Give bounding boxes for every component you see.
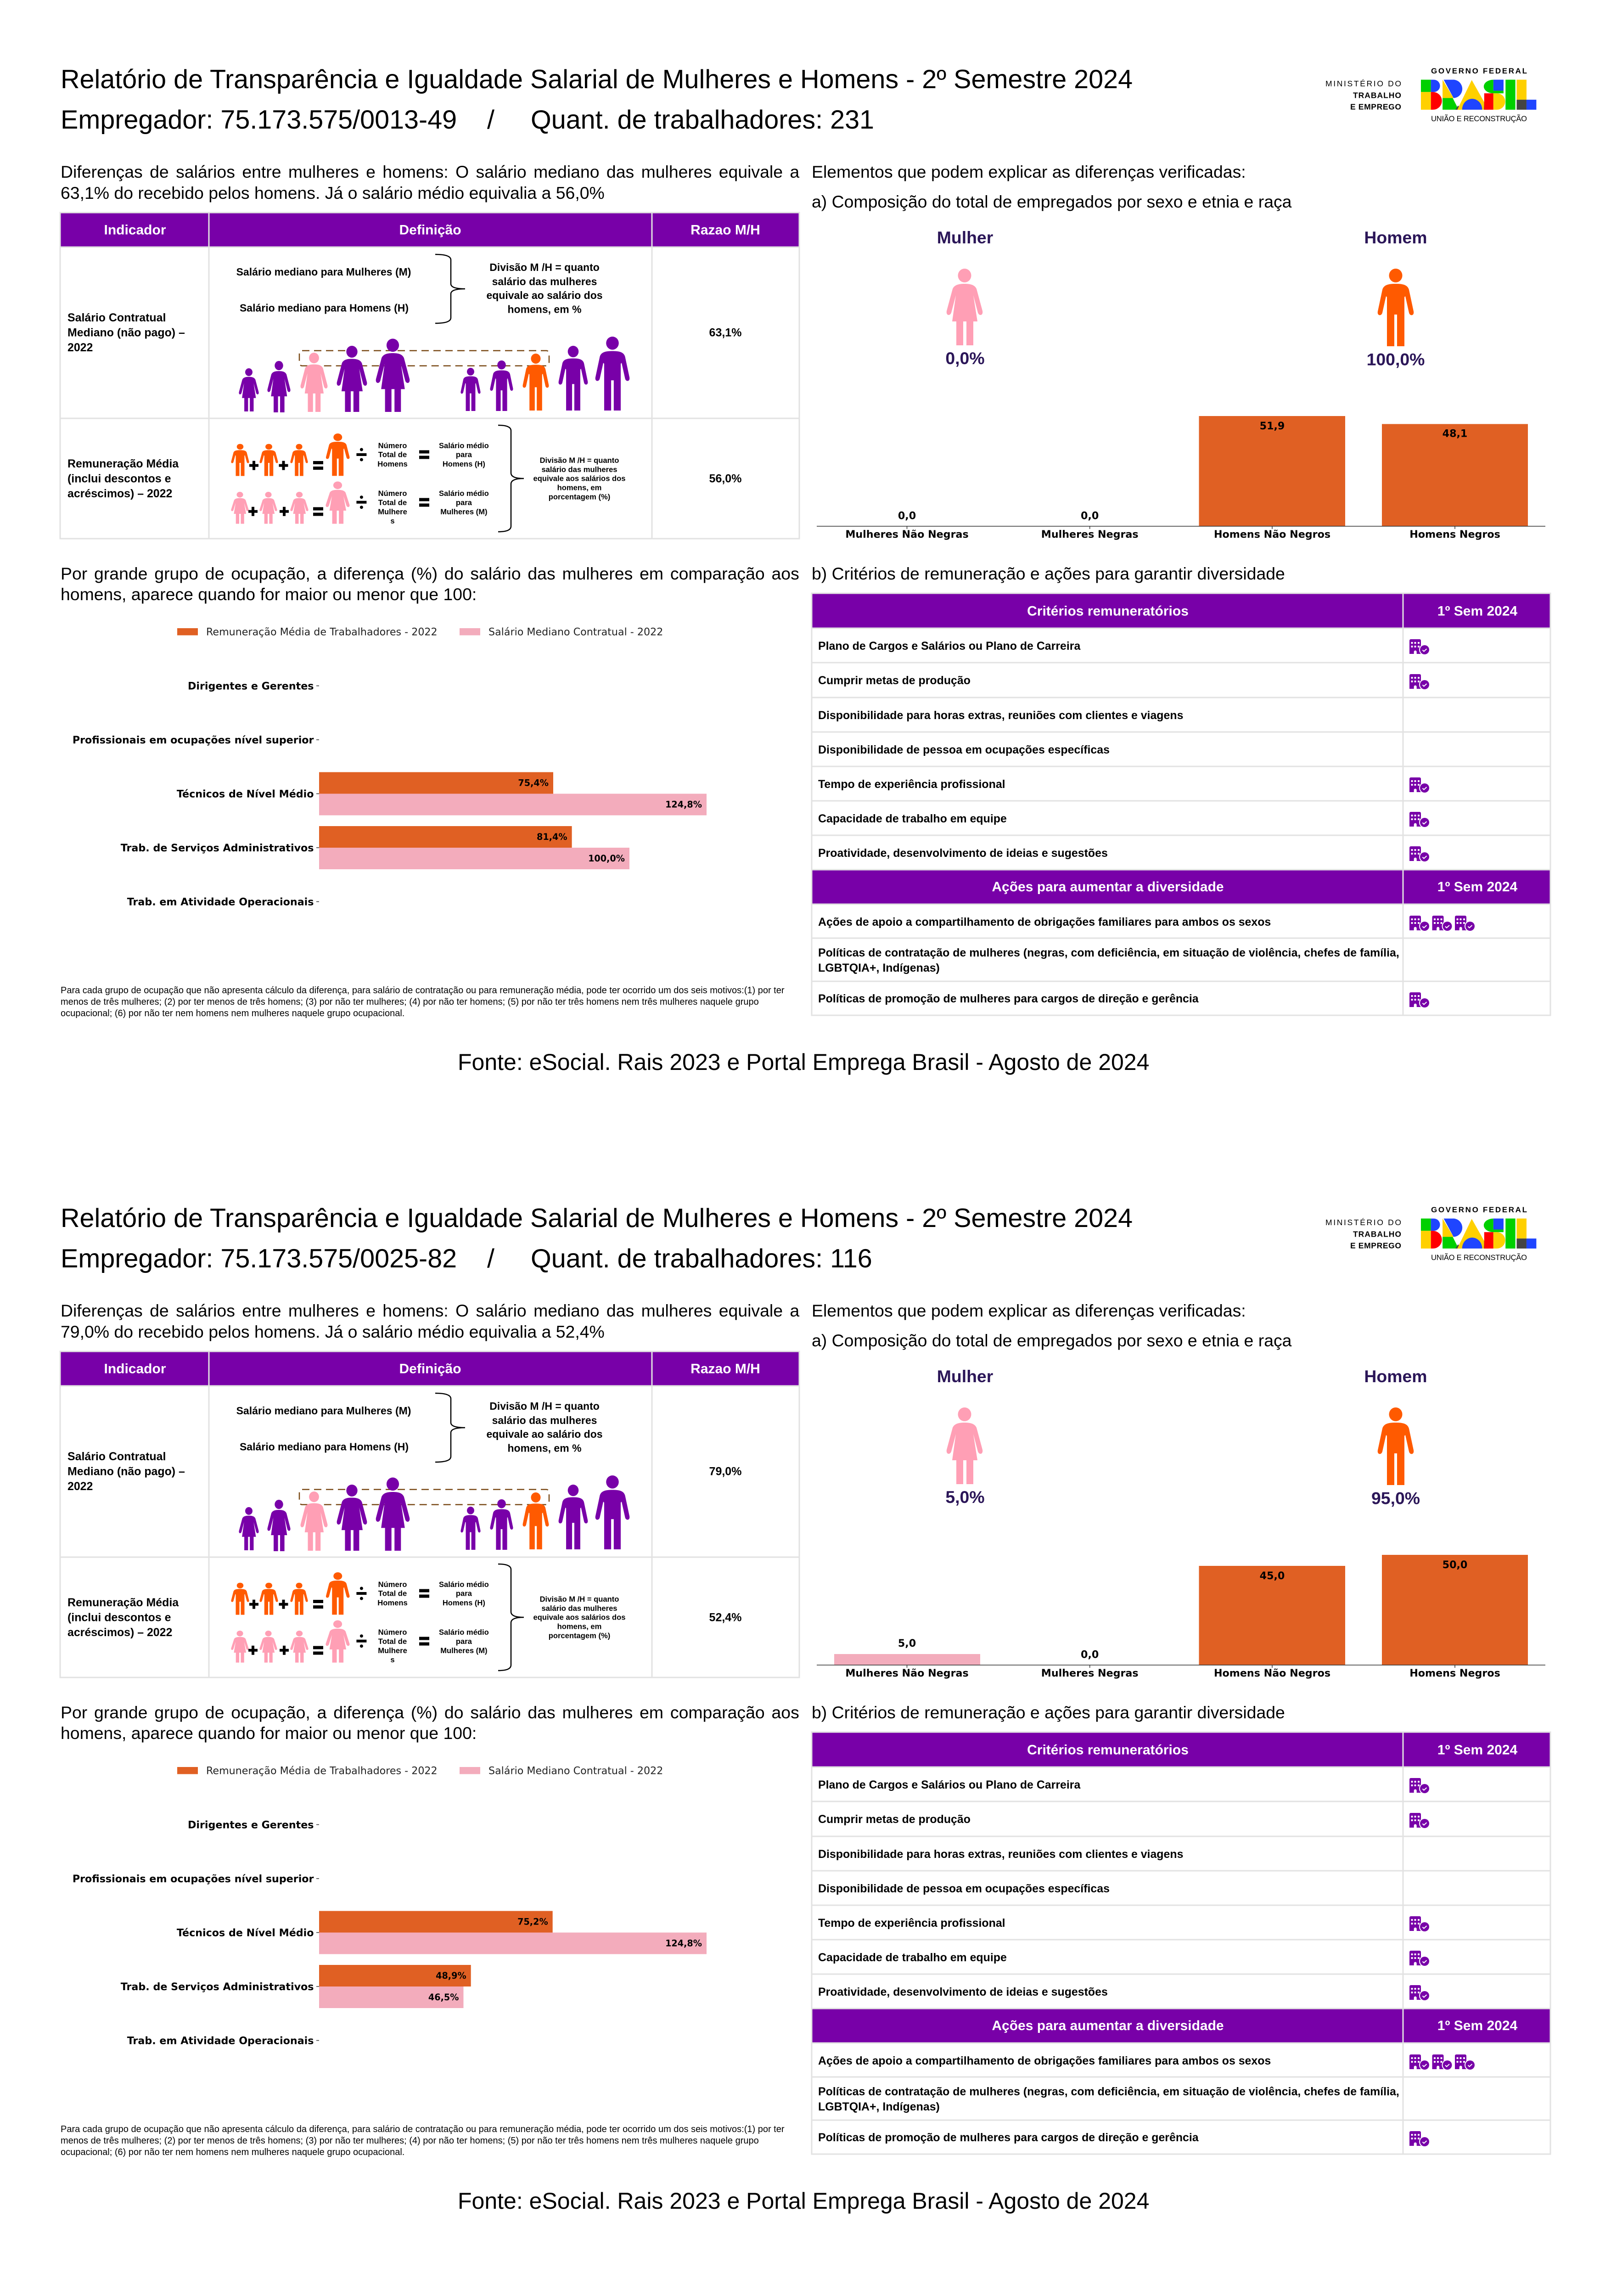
footnote: ocupacional; (6) por não ter nem homens nem mulheres naquele grupo ocupacional. [61,1008,404,1019]
definition: median formula [236,1393,603,1462]
chart: man share [1364,228,1427,369]
definition: average formula: porcentagem (%) [549,1632,610,1640]
horizontal bar chart: occupation groups: 100,0% [588,853,625,864]
criteria rows: Disponibilidade para horas extras, reuniões com clientes e viagens [818,1848,1183,1861]
chart: woman share: 0,0% [945,349,985,368]
bar chart: sex and race composition [817,416,1545,540]
horizontal bar chart: occupation groups: 46,5% [428,1992,459,2003]
logo: ministry and federal government: E EMPREGO [1350,102,1401,112]
criteria rows: Plano de Cargos e Salários ou Plano de Carreira [818,1778,1080,1791]
title: / [487,1244,494,1273]
source: Fonte: eSocial. Rais 2023 e Portal Emprega Brasil - Agosto de 2024 [458,1049,1149,1075]
definition: average formula: para [456,1589,472,1598]
panel: criteria and actions table [812,593,1550,1015]
action rows: Ações de apoio a compartilhamento de obrigações familiares para ambos os sexos [818,2054,1271,2067]
text: salary differences summary [61,1301,799,1341]
horizontal bar chart: occupation groups: Trab. em Atividade Operacionais [127,2035,314,2047]
bar chart: sex and race composition: 51,9 [1260,420,1285,432]
chart: woman share: Mulher [937,1367,993,1386]
indicator: median contractual salary: Salário Contratual [67,311,166,324]
definition: median formula [236,254,603,323]
definition: average formula: Homens [377,1598,408,1607]
title: Quant. de trabalhadores: 116 [531,1244,872,1273]
definition: average formula: Homens [377,460,408,468]
bar chart: sex and race composition: Mulheres Negras [1041,529,1139,540]
action rows: LGBTQIA+, Indígenas) [818,962,940,974]
horizontal bar chart: occupation groups: 124,8% [665,799,702,810]
definition: median formula: Salário mediano para Homens (H) [240,1441,409,1453]
logo: ministry and federal government: TRABALHO [1353,91,1401,100]
logo: ministry and federal government: UNIÃO E RECONSTRUÇÃO [1431,114,1527,123]
definition: average formula: homens, em [557,484,601,492]
criteria rows [818,640,1183,860]
definition: median formula: Salário mediano para Homens (H) [240,302,409,314]
text: occupation heading [61,1703,799,1743]
ratio: median: 79,0% [709,1465,741,1478]
text: salary differences summary: 63,1% do recebido pelos homens. Já o salário médio equivalia a 56,0% [61,183,605,203]
bar chart: sex and race composition: 50,0 [1443,1559,1467,1571]
horizontal bar chart: occupation groups [73,681,707,908]
header: diversity actions: 1º Sem 2024 [1437,2018,1518,2033]
title: Relatório de Transparência e Igualdade Salarial de Mulheres e Homens - 2º Semestre 2024 [61,65,1133,94]
table header: Razao M/H [690,1361,760,1377]
report panel: employer 0025-82 [60,1204,1550,2214]
definition: average formula: porcentagem (%) [549,493,610,501]
action rows: Políticas de contratação de mulheres (negras, com deficiência, em situação de violência, chefes de família, [818,2085,1399,2098]
bar chart: sex and race composition: 0,0 [1081,510,1099,522]
logo: ministry and federal government: GOVERNO FEDERAL [1431,67,1527,75]
bar chart: sex and race composition: Homens Não Negros [1214,529,1330,540]
definition: average formula: Salário médio [439,489,489,498]
criteria rows: Disponibilidade de pessoa em ocupações específicas [818,1882,1110,1895]
footnote: menos de três mulheres; (2) por ter menos de três homens; (3) por não ter mulheres; (4) por não ter homens; (5) por não ter três homens nem três mulheres naquele grupo [61,2136,759,2146]
bar chart: sex and race composition: Mulheres Não Negras [845,1667,969,1679]
indicator: average remuneration: Remuneração Média [67,1596,179,1609]
definition: average formula: Total de [378,1589,407,1598]
definition: average formula: Número [378,489,407,498]
definition: median formula: Salário mediano para Mulheres (M) [236,266,411,278]
horizontal bar chart: occupation groups: Dirigentes e Gerentes [188,681,314,692]
definition: average formula: homens, em [557,1622,601,1631]
footnote [61,985,785,1019]
legend [177,626,663,638]
bar chart: sex and race composition: 0,0 [1081,1649,1099,1660]
horizontal bar chart: occupation groups: Trab. de Serviços Administrativos [121,842,314,854]
bar chart: sex and race composition: Mulheres Negras [1041,1667,1139,1679]
text: criteria heading: b) Critérios de remuneração e ações para garantir diversidade [812,564,1285,583]
horizontal bar chart: occupation groups: Profissionais em ocupações nível superior [73,734,314,746]
definition: average formula: Total de [378,498,407,507]
text: composition heading [812,1301,1292,1350]
criteria rows: Capacidade de trabalho em equipe [818,1951,1007,1964]
title [61,65,1133,135]
horizontal bar chart: occupation groups: 124,8% [665,1938,702,1949]
header: remuneration criteria: 1º Sem 2024 [1437,1743,1518,1758]
action rows [818,2054,1399,2144]
indicator: average remuneration: (inclui descontos e [67,473,171,485]
panel: indicator table [60,1351,799,1677]
definition: average formula: Homens (H) [443,1598,485,1607]
indicator: median contractual salary: 2022 [67,1480,93,1493]
logo: ministry and federal government [1325,67,1536,123]
bar chart: sex and race composition: 45,0 [1260,1570,1285,1582]
header: remuneration criteria [1027,604,1518,619]
text: salary differences summary [61,162,799,203]
legend: Salário Mediano Contratual - 2022 [488,626,663,638]
criteria rows: Disponibilidade de pessoa em ocupações específicas [818,743,1110,756]
footnote [61,2124,785,2157]
definition: average formula: Mulhere [378,1646,407,1655]
header: diversity actions: Ações para aumentar a diversidade [992,879,1224,895]
definition: median formula: Divisão M /H = quanto [489,261,600,273]
title: Empregador: 75.173.575/0013-49 [61,105,457,135]
definition: median formula: Salário mediano para Mulheres (M) [236,1405,411,1417]
legend: Remuneração Média de Trabalhadores - 2022 [206,1765,438,1777]
action rows [818,916,1399,1005]
text: composition heading: Elementos que podem explicar as diferenças verificadas: [812,162,1246,181]
bar chart: sex and race composition: Homens Negros [1409,529,1500,540]
text: composition heading [812,162,1292,211]
title: / [487,105,494,135]
bar chart: sex and race composition [817,1555,1545,1679]
bar chart: sex and race composition: 5,0 [898,1638,916,1649]
icons: criteria marks [1409,1778,1430,2001]
definition: average formula: salário das mulheres [541,465,617,474]
indicator: average remuneration: acréscimos) – 2022 [67,487,172,500]
header: diversity actions: Ações para aumentar a diversidade [992,2018,1224,2033]
definition: median formula: salário das mulheres [492,276,597,287]
definition: average formula: Mulhere [378,507,407,516]
logo: ministry and federal government: E EMPREGO [1350,1241,1401,1250]
criteria rows: Tempo de experiência profissional [818,778,1005,791]
definition: average formula: Número [378,1628,407,1637]
horizontal bar chart: occupation groups: Trab. em Atividade Operacionais [127,896,314,908]
icons: action marks [1409,916,1476,1008]
table header: Indicador [104,222,166,238]
definition: average formula: para [456,1637,472,1646]
criteria rows: Proatividade, desenvolvimento de ideias e sugestões [818,1986,1108,1998]
criteria rows: Tempo de experiência profissional [818,1917,1005,1930]
table header: Definição [399,222,461,238]
text: occupation heading: homens, aparece quando for maior ou menor que 100: [61,1723,477,1743]
logo: ministry and federal government: GOVERNO FEDERAL [1431,1205,1527,1214]
horizontal bar chart: occupation groups: Técnicos de Nível Médio [177,788,314,800]
definition: average formula: Número [378,1580,407,1589]
definition: average formula: s [390,517,395,525]
text: occupation heading: Por grande grupo de ocupação, a diferença (%) do salário das mulheres em comparação aos [61,1703,799,1722]
criteria rows [818,1778,1183,1998]
horizontal bar chart: occupation groups: Profissionais em ocupações nível superior [73,1873,314,1885]
logo: ministry and federal government: UNIÃO E RECONSTRUÇÃO [1431,1253,1527,1262]
definition: average formula: Divisão M /H = quanto [540,456,619,465]
definition: average formula: Salário médio [439,441,489,450]
indicator: average remuneration: (inclui descontos e [67,1611,171,1624]
bar chart: sex and race composition: Homens Não Negros [1214,1667,1330,1679]
horizontal bar chart: occupation groups: 75,4% [518,778,549,788]
header: remuneration criteria: Critérios remuneratórios [1027,604,1189,619]
footnote: menos de três mulheres; (2) por ter menos de três homens; (3) por não ter mulheres; (4) por não ter homens; (5) por não ter três homens nem três mulheres naquele grupo [61,997,759,1007]
definition: average formula: Homens (H) [443,460,485,468]
text: composition heading: a) Composição do total de empregados por sexo e etnia e raça [812,1331,1292,1350]
definition: median formula: Divisão M /H = quanto [489,1400,600,1412]
indicator: average remuneration: Remuneração Média [67,457,179,470]
definition: average formula: para [456,450,472,459]
horizontal bar chart: occupation groups: Dirigentes e Gerentes [188,1819,314,1831]
action rows: LGBTQIA+, Indígenas) [818,2100,940,2113]
logo: ministry and federal government [1325,1205,1536,1262]
logo: ministry and federal government: MINISTÉRIO DO [1325,79,1401,88]
definition: average formula: s [390,1655,395,1664]
definition: average formula: Mulheres (M) [440,507,488,516]
icons: criteria marks [1409,639,1430,862]
footnote: Para cada grupo de ocupação que não apresenta cálculo da diferença, para salário de contratação ou para remuneração média, pode ter ocorrido um dos seis motivos:(1) por ter [61,2124,785,2134]
definition: average formula: equivale aos salários dos [533,474,626,483]
title [61,1204,1133,1273]
legend: Remuneração Média de Trabalhadores - 2022 [206,626,438,638]
text: occupation heading: homens, aparece quando for maior ou menor que 100: [61,585,477,604]
legend [177,1765,663,1777]
criteria rows: Proatividade, desenvolvimento de ideias e sugestões [818,847,1108,860]
table header: Definição [399,1361,461,1377]
chart: man share: 100,0% [1367,350,1425,369]
definition: median formula: equivale ao salário dos [486,1428,603,1440]
bar chart: sex and race composition: 48,1 [1443,428,1467,440]
panel: criteria and actions table [812,1732,1550,2154]
definition: median formula: equivale ao salário dos [486,289,603,301]
source: Fonte: eSocial. Rais 2023 e Portal Emprega Brasil - Agosto de 2024 [458,2188,1149,2214]
definition: average formula: Número [378,441,407,450]
table header [104,1361,760,1377]
definition: average formula: Total de [378,450,407,459]
criteria rows: Cumprir metas de produção [818,1813,971,1826]
criteria rows: Capacidade de trabalho em equipe [818,812,1007,825]
bar chart: sex and race composition: 0,0 [898,510,916,522]
title: Empregador: 75.173.575/0025-82 [61,1244,457,1273]
criteria rows: Disponibilidade para horas extras, reuniões com clientes e viagens [818,709,1183,722]
definition: average formula: para [456,498,472,507]
header: remuneration criteria: 1º Sem 2024 [1437,604,1518,619]
chart: man share: Homem [1364,228,1427,247]
text: salary differences summary: Diferenças de salários entre mulheres e homens: O salário mediano das mulheres equivale a [61,162,799,181]
action rows: Ações de apoio a compartilhamento de obrigações familiares para ambos os sexos [818,916,1271,929]
definition: average formula: Salário médio [439,1580,489,1589]
criteria rows: Plano de Cargos e Salários ou Plano de Carreira [818,640,1080,653]
title: Relatório de Transparência e Igualdade Salarial de Mulheres e Homens - 2º Semestre 2024 [61,1204,1133,1233]
text: composition heading: Elementos que podem explicar as diferenças verificadas: [812,1301,1246,1320]
chart: woman share: 5,0% [945,1487,985,1507]
text: composition heading: a) Composição do total de empregados por sexo e etnia e raça [812,192,1292,211]
definition: average formula [231,425,626,532]
horizontal bar chart: occupation groups: Técnicos de Nível Médio [177,1927,314,1939]
text: salary differences summary: Diferenças de salários entre mulheres e homens: O salário mediano das mulheres equivale a [61,1301,799,1320]
title: Quant. de trabalhadores: 231 [531,105,874,135]
footnote: ocupacional; (6) por não ter nem homens nem mulheres naquele grupo ocupacional. [61,2147,404,2157]
definition: average formula: Salário médio [439,1628,489,1637]
ratio: average: 52,4% [709,1611,741,1624]
icons: action marks [1409,2054,1476,2147]
definition: median formula: salário das mulheres [492,1414,597,1426]
action rows: Políticas de promoção de mulheres para cargos de direção e gerência [818,992,1199,1005]
text: occupation heading: Por grande grupo de ocupação, a diferença (%) do salário das mulheres em comparação aos [61,564,799,583]
horizontal bar chart: occupation groups: 75,2% [517,1917,548,1927]
chart: woman share [937,228,993,368]
definition: average formula: Total de [378,1637,407,1646]
bar chart: sex and race composition: Homens Negros [1409,1667,1500,1679]
chart: woman share [937,1367,993,1507]
criteria rows: Cumprir metas de produção [818,674,971,687]
chart: man share: Homem [1364,1367,1427,1386]
header: remuneration criteria [1027,1743,1518,1758]
horizontal bar chart: occupation groups [73,1819,707,2047]
horizontal bar chart: occupation groups: Trab. de Serviços Administrativos [121,1981,314,1993]
table header: Indicador [104,1361,166,1377]
definition: median formula: homens, em % [507,303,582,315]
chart: man share [1364,1367,1427,1508]
definition: average formula: Divisão M /H = quanto [540,1595,619,1604]
table header: Razao M/H [690,222,760,238]
definition: average formula: Mulheres (M) [440,1646,488,1655]
header: diversity actions [992,879,1518,895]
report panel: employer 0013-49 [60,65,1550,1075]
logo: ministry and federal government: TRABALHO [1353,1230,1401,1239]
header: remuneration criteria: Critérios remuneratórios [1027,1743,1189,1758]
header: diversity actions: 1º Sem 2024 [1437,879,1518,895]
indicator: median contractual salary: 2022 [67,341,93,354]
horizontal bar chart: occupation groups: 48,9% [436,1970,466,1981]
chart: man share: 95,0% [1371,1489,1420,1508]
legend: Salário Mediano Contratual - 2022 [488,1765,663,1777]
action rows: Políticas de contratação de mulheres (negras, com deficiência, em situação de violência, chefes de família, [818,946,1399,959]
ratio: median: 63,1% [709,326,741,339]
definition: average formula: equivale aos salários dos [533,1613,626,1622]
footnote: Para cada grupo de ocupação que não apresenta cálculo da diferença, para salário de contratação ou para remuneração média, pode ter ocorrido um dos seis motivos:(1) por ter [61,985,785,996]
header: diversity actions [992,2018,1518,2033]
definition: average formula [231,1564,626,1671]
icon: median people illustration [239,1475,629,1551]
indicator: median contractual salary: Salário Contratual [67,1450,166,1463]
bar chart: sex and race composition: Mulheres Não Negras [845,529,969,540]
definition: median formula: homens, em % [507,1442,582,1454]
panel: indicator table [60,213,799,539]
definition: average formula: salário das mulheres [541,1604,617,1613]
indicator: average remuneration: acréscimos) – 2022 [67,1626,172,1639]
text: occupation heading [61,564,799,604]
text: salary differences summary: 79,0% do recebido pelos homens. Já o salário médio equivalia a 52,4% [61,1322,605,1341]
action rows: Políticas de promoção de mulheres para cargos de direção e gerência [818,2131,1199,2144]
text: criteria heading: b) Critérios de remuneração e ações para garantir diversidade [812,1703,1285,1722]
indicator: median contractual salary: Mediano (não pago) – [67,1465,185,1478]
horizontal bar chart: occupation groups: 81,4% [537,832,567,842]
icon: median people illustration [239,337,629,412]
indicator: median contractual salary: Mediano (não pago) – [67,326,185,339]
chart: woman share: Mulher [937,228,993,247]
table header [104,222,760,238]
logo: ministry and federal government: MINISTÉRIO DO [1325,1218,1401,1227]
ratio: average: 56,0% [709,473,741,485]
